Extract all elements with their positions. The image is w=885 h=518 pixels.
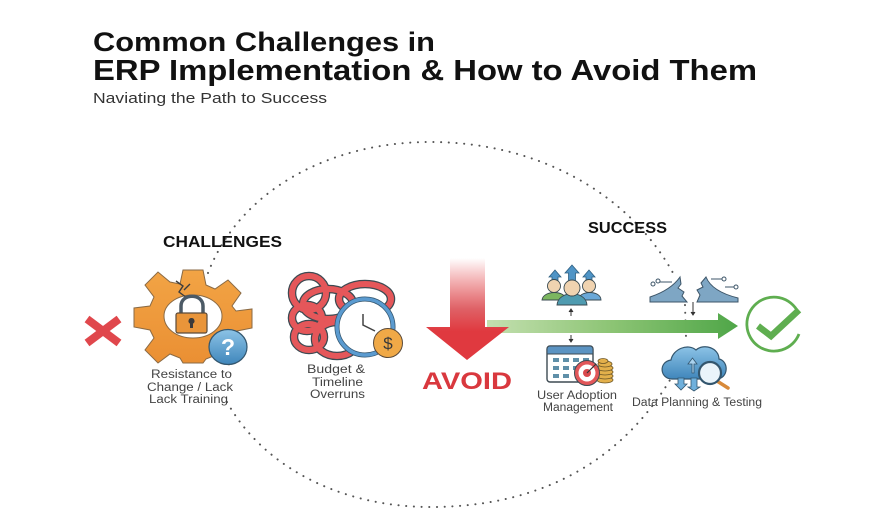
centre person bbox=[557, 280, 587, 305]
label: resistance to change: Resistance to bbox=[151, 369, 232, 381]
magnifier bbox=[717, 381, 728, 388]
label: user adoption: User Adoption bbox=[537, 390, 617, 402]
left bridge span bbox=[650, 277, 687, 302]
right bridge span bbox=[697, 277, 738, 302]
calendar bbox=[547, 346, 593, 382]
keyhole bbox=[188, 318, 195, 328]
icon: calendar with target and coins bbox=[547, 346, 613, 386]
clock bbox=[337, 299, 393, 355]
label: budget and timeline: Timeline bbox=[312, 377, 363, 389]
icon: red cross bbox=[87, 319, 119, 343]
up arrows bbox=[549, 265, 595, 283]
icon: broken bridge bbox=[650, 277, 738, 302]
subtitle: Naviating the Path to Success bbox=[93, 91, 327, 107]
label: budget and timeline: Budget & bbox=[307, 364, 365, 376]
arrow: green success arrow bbox=[487, 313, 738, 339]
label: resistance to change: Lack Training bbox=[149, 394, 228, 406]
icon: tangled chains with clock and coin: $ bbox=[383, 334, 393, 353]
right person bbox=[578, 280, 601, 300]
clock hands bbox=[363, 314, 375, 331]
clock rim bbox=[337, 299, 393, 355]
chain links bbox=[292, 276, 391, 356]
label: user adoption bbox=[537, 390, 617, 414]
cloud bbox=[662, 347, 726, 379]
question badge bbox=[209, 330, 247, 364]
gear body bbox=[134, 270, 252, 365]
label: user adoption: Management bbox=[543, 402, 614, 414]
left person bbox=[542, 280, 566, 300]
title: Common Challenges in bbox=[93, 27, 435, 57]
calendar header bbox=[547, 346, 593, 354]
icon: cracked gear with lock: ? bbox=[221, 334, 235, 360]
dotted path circle bbox=[208, 142, 686, 507]
label: budget and timeline bbox=[307, 364, 365, 401]
bridge nodes bbox=[651, 277, 738, 289]
small connector arrows bbox=[569, 302, 695, 342]
label: resistance to change bbox=[147, 369, 233, 406]
title bbox=[93, 27, 757, 87]
down arrows bbox=[675, 378, 700, 391]
icon: cracked gear with lock bbox=[134, 270, 252, 365]
gear crack bbox=[176, 281, 190, 298]
section label: success: SUCCESS bbox=[588, 220, 667, 237]
padlock body bbox=[176, 313, 207, 333]
target bbox=[574, 360, 600, 386]
icon: tangled chains with clock and coin bbox=[292, 276, 402, 358]
icon: success check circle bbox=[747, 297, 799, 351]
icon: cloud with magnifier bbox=[662, 347, 728, 391]
cloud up arrow bbox=[688, 358, 697, 373]
padlock shackle bbox=[181, 296, 203, 314]
title: ERP Implementation & How to Avoid Them bbox=[93, 55, 757, 87]
section label: challenges: CHALLENGES bbox=[163, 234, 282, 251]
arrow: red avoid arrow bbox=[426, 258, 509, 360]
label: data planning: Data Planning & Testing bbox=[632, 397, 762, 409]
label: avoid: AVOID bbox=[422, 368, 512, 395]
calendar cells bbox=[553, 358, 589, 378]
label: budget and timeline: Overruns bbox=[310, 389, 365, 401]
coin stack bbox=[597, 358, 613, 383]
dollar coin bbox=[374, 328, 402, 358]
label: resistance to change: Change / Lack bbox=[147, 382, 233, 394]
icon: people with rising arrows bbox=[542, 265, 601, 305]
